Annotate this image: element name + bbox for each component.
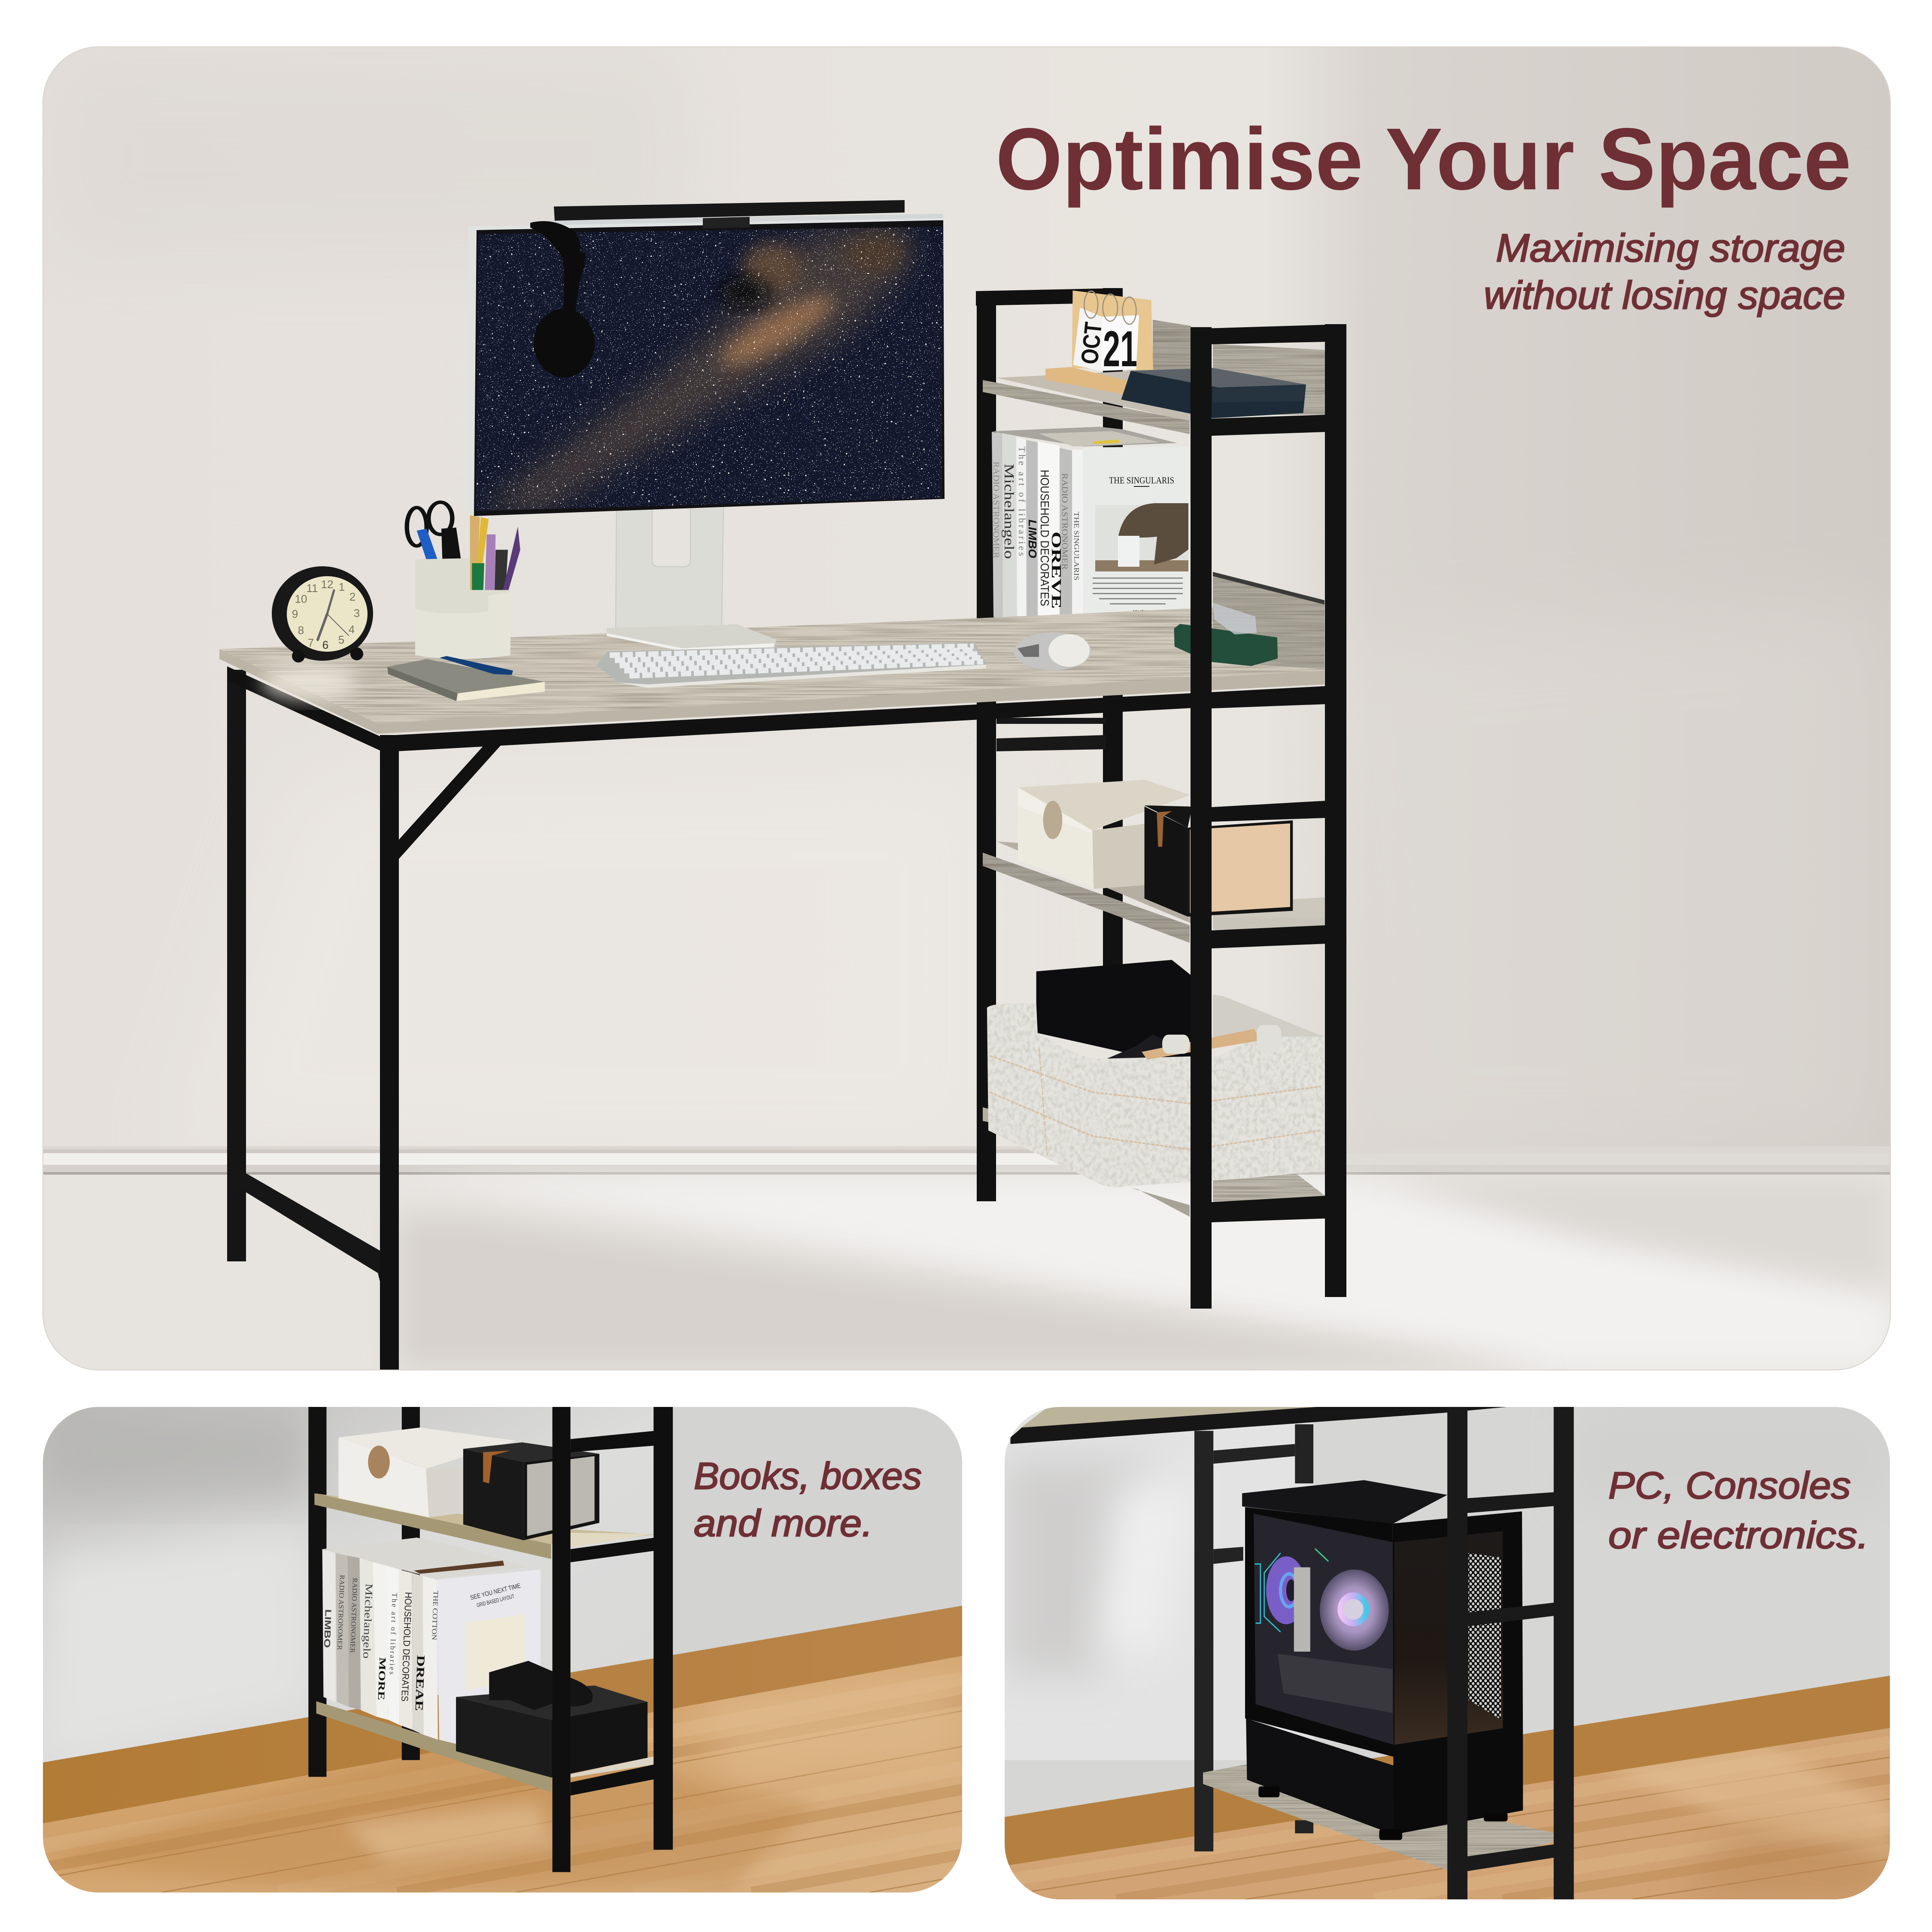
book spine texts: LIMBO [322,1609,333,1648]
bottom shelf [983,1107,1325,1217]
upper shelf [314,1493,655,1546]
pen holder [407,502,520,659]
shelf back-left post [977,291,996,1201]
keyboard [597,643,986,688]
wall [43,1407,962,1893]
floor [1005,1728,1890,1899]
monitor [468,215,949,519]
front shelf posts and cross bars [1191,324,1346,1309]
panel: PC, consoles or electronics [1005,1407,1890,1900]
game box on top shelf [1121,368,1306,418]
clock numerals [292,578,360,651]
desk front rail [380,686,1327,752]
shelving unit (zoom coordinates) [308,1407,673,1872]
wall left bright area [43,1528,309,1760]
calendar text OCT: OCT [1075,321,1107,365]
subtitle: Maximising storage [1496,226,1845,270]
baseboard [1005,1676,1890,1866]
headphones [530,221,595,377]
panel: main desk scene [43,47,1890,1372]
black box in basket [1036,960,1191,1067]
clock numerals: 5 [338,633,344,646]
clock numerals: 12 [321,578,333,591]
spine texts: OREVE [1049,532,1064,609]
monitor stand [607,507,777,651]
desk top [219,572,1324,734]
spine texts: LIMBO [1026,519,1039,558]
clock numerals: 4 [349,623,355,636]
top shelf with back panel [983,320,1325,434]
book spine texts: HOUSEHOLD DECORATES [399,1592,414,1702]
floor boards [43,1679,962,1893]
lower back rail [996,735,1106,751]
clock numerals: 9 [292,608,298,620]
base front [1246,1719,1394,1835]
monitor light bar [549,200,943,228]
lower shelf [316,1701,551,1792]
spine texts: RADIO ASTRONOMER [1060,473,1069,570]
caption: books, boxes and more: and more. [694,1502,873,1544]
book spine texts: RADIO ASTRONOMER [349,1578,358,1653]
clock numerals: 1 [339,580,345,593]
cover text: SEE YOU NEXT TIME [470,1582,521,1601]
lower side rail [231,1164,380,1282]
book spine texts [322,1575,439,1711]
book spine texts: THE COTTON [430,1591,439,1640]
clock numerals: 10 [295,592,307,605]
cover text: GRID BASED LAYOUT [476,1593,515,1608]
book spines [322,1549,336,1702]
clock numerals: 8 [298,624,304,637]
shelf 2 with storage boxes [983,780,1325,943]
desk top [1019,1407,1318,1429]
left back leg [227,670,246,1261]
books row [991,427,1190,642]
diagonal brace and front leg [380,735,502,1370]
shelf top back rail [976,288,1123,306]
clock numerals: 2 [349,590,355,603]
baseboard [43,1606,962,1823]
book spine texts: DREAE [413,1655,427,1711]
wall shading [1005,1407,1890,1760]
calendar [1045,291,1153,395]
desk and frame (zoom coordinates) [1010,1407,1557,1871]
cover text [470,1582,523,1610]
book spine texts: The art of libraries [388,1593,399,1674]
feet [1258,1786,1508,1840]
spine texts: The art of libraries [1017,447,1027,556]
glare on desk [262,665,356,700]
clock numerals: 6 [322,638,328,651]
calendar text 21: 21 [1103,321,1137,377]
side glass [1394,1531,1503,1745]
mouse [1014,632,1091,670]
caption: PC, consoles or electronics [1608,1464,1869,1556]
front frame [1245,1507,1394,1757]
cover label: JOURNAL [1132,609,1153,615]
panel outline [43,47,1890,1370]
wall background [43,47,1890,1163]
book spine texts: MORE [376,1657,388,1701]
caption: books, boxes and more [694,1455,922,1544]
front glass [1254,1514,1394,1745]
left side rail [227,666,380,750]
clock numerals: 7 [308,636,314,649]
spine texts [991,447,1081,609]
front fan [1320,1570,1389,1650]
shelf back-mid post [1103,288,1123,1018]
scissors [407,502,452,546]
spine texts: Michelangelo [1002,464,1017,559]
mesh panel [1468,1553,1501,1719]
RGB strips [1255,1549,1328,1632]
PC top [1242,1480,1447,1524]
wall shadow [43,1407,309,1497]
panel: books, boxes and more [43,1407,962,1893]
book spine texts: Michelangelo [361,1583,374,1659]
back posts [1194,1424,1313,1851]
cover title: THE SINGULARIS [1109,475,1174,486]
bottom shelf [1203,1764,1557,1871]
black box lower [456,1686,647,1720]
PC case body [1245,1507,1523,1840]
notebook with pen [387,656,545,701]
front posts and bars [1447,1407,1574,1900]
clock numerals: 3 [354,607,360,620]
monitor screen: galaxy [472,215,949,519]
title: Optimise Your Space [996,110,1851,208]
book spine texts: RADIO ASTRONOMER [336,1575,346,1650]
baseboard and floor [43,1146,1890,1372]
side frame [1393,1511,1523,1835]
rear fan [1266,1556,1306,1624]
front posts and bars [553,1407,673,1872]
clock numerals: 11 [307,582,318,595]
caption: PC, consoles or electronics: or electronics. [1608,1514,1869,1556]
game controller [489,1661,593,1710]
spine texts: HOUSEHOLD DECORATES [1038,470,1051,606]
spine texts: THE SINGULARIS [1072,512,1081,580]
subtitle [1484,226,1845,317]
subtitle: without losing space [1484,273,1845,317]
cover cat photo [1095,503,1188,571]
caption: books, boxes and more: Books, boxes [694,1455,922,1497]
floor lights [1597,1743,1890,1898]
cooler heatsink [1294,1567,1310,1652]
back posts [308,1407,420,1777]
wall right side [673,1407,962,1700]
caption: PC, consoles or electronics: PC, Consoles [1608,1464,1851,1507]
black box with silver side [463,1442,599,1462]
white jewellery box [1018,780,1191,889]
green glasses case [1174,603,1278,666]
clock [272,566,373,662]
spine texts: RADIO ASTRONOMER [991,462,1001,559]
felt basket [987,994,1324,1187]
black and peach box [1145,805,1293,917]
wall [1005,1407,1890,1899]
floor light streaks [43,1666,962,1889]
floor boards [1005,1742,1890,1899]
white box [339,1428,516,1469]
cover small text [1093,577,1183,605]
desk rear frame and shelf back posts [227,288,1123,1282]
floor [43,1656,962,1893]
book pages [322,1537,528,1579]
